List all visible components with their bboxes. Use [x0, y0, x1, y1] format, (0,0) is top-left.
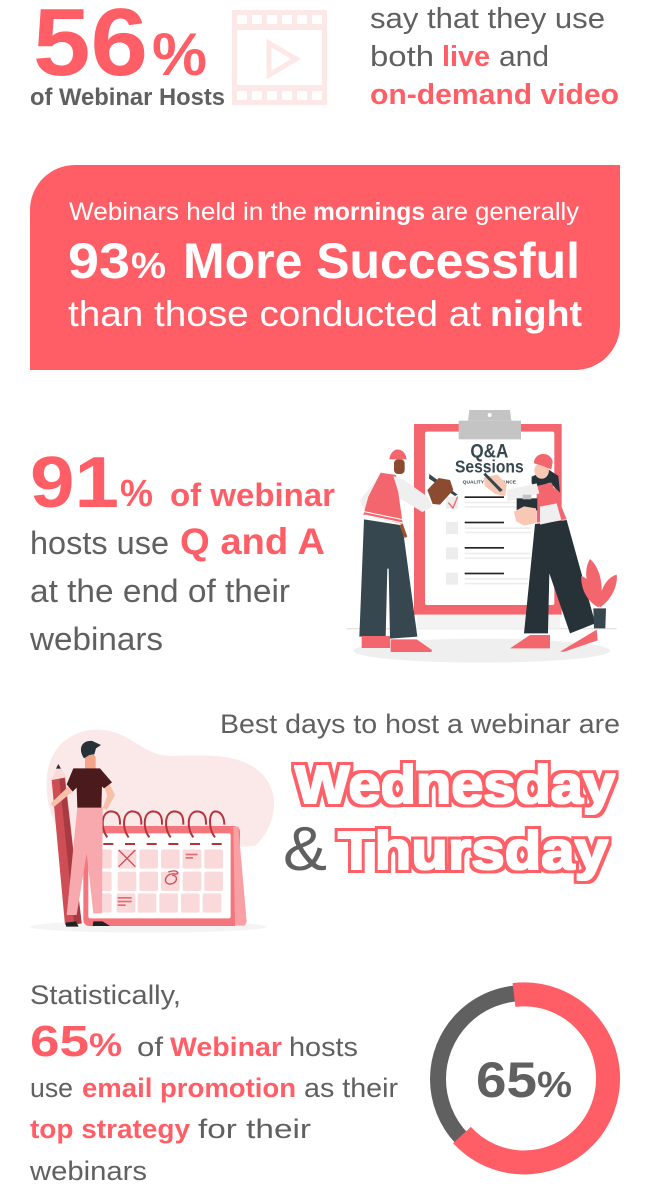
- panel: morning webinars: [30, 165, 620, 370]
- big number 56%: %: [152, 21, 207, 88]
- text: email promotion stat: 65: [30, 1017, 89, 1066]
- section: 56 percent stat: [30, 0, 619, 111]
- text: 91% of webinar hosts: at the end of their: [30, 573, 290, 609]
- text: email promotion stat: as their: [304, 1073, 398, 1103]
- panel headline: 93% More Successful: More Successful: [183, 233, 580, 289]
- chart: 65 percent donut: %: [537, 1064, 572, 1105]
- big number 56%: [33, 0, 207, 96]
- outlined word: Wednesday: Wednesday: [295, 755, 615, 815]
- caption: of Webinar Hosts: of Webinar Hosts: [30, 84, 225, 111]
- text: 91% of webinar hosts: [29, 443, 335, 657]
- section: email promotion: [29, 980, 610, 1186]
- chart: 65 percent donut: 65: [476, 1052, 537, 1108]
- text: 91% of webinar hosts: of webinar: [170, 477, 335, 513]
- text: email promotion stat: use: [30, 1073, 73, 1103]
- text: live and on-demand video: live: [442, 41, 490, 73]
- illustration: Q and A clipboard with two people: QUALITY ASSURANCE: [463, 479, 516, 484]
- text: email promotion stat: of: [137, 1032, 164, 1062]
- text: email promotion stat: %: [89, 1027, 122, 1063]
- text: live and on-demand video: on-demand video: [370, 79, 619, 111]
- chart: 65 percent donut: [438, 993, 610, 1165]
- plant: [581, 559, 617, 628]
- text: email promotion stat: Statistically,: [30, 980, 181, 1010]
- text: live and on-demand video: both: [370, 41, 434, 73]
- panel line 1: mornings: [313, 198, 425, 226]
- text: live and on-demand video: say that they use: [370, 3, 605, 35]
- section: best days: [30, 709, 620, 933]
- text: 91% of webinar hosts: %: [120, 473, 153, 515]
- text: best days to host: Best days to host a webinar are: [220, 709, 620, 739]
- illustration: man with pencil and calendar: [30, 730, 274, 933]
- panel headline: 93% More Successful: %: [131, 245, 166, 286]
- text: email promotion stat: webinars: [29, 1156, 147, 1186]
- ampersand: &: [283, 815, 327, 884]
- panel line 1: are generally: [431, 198, 580, 226]
- panel headline: 93% More Successful: 93: [68, 233, 130, 289]
- person right: [483, 454, 598, 652]
- icon: video film strip: [232, 10, 327, 105]
- illustration: Q and A clipboard with two people: Sessions: [455, 457, 524, 477]
- text: 91% of webinar hosts: Q and A: [180, 521, 325, 562]
- panel line 1: Webinars held in the: [69, 198, 307, 226]
- illustration: Q and A clipboard with two people: Q&A: [470, 441, 508, 462]
- panel line 1: [69, 198, 580, 226]
- text: live and on-demand video: and: [499, 41, 549, 73]
- person left: [359, 449, 458, 652]
- outlined word: Thursday: Thursday: [338, 821, 608, 881]
- text: email promotion stat: hosts: [289, 1032, 358, 1062]
- panel line 3: than those conducted at: [68, 293, 481, 334]
- illustration: Q and A clipboard with two people: [347, 410, 617, 663]
- text: email promotion stat: top strategy: [30, 1114, 190, 1144]
- text: email promotion stat: Webinar: [170, 1032, 283, 1062]
- text: 91% of webinar hosts: 91: [30, 443, 119, 523]
- text: live and on-demand video: [370, 3, 619, 111]
- text: email promotion stat: email promotion: [82, 1073, 296, 1103]
- panel background: [30, 165, 620, 370]
- text: 91% of webinar hosts: webinars: [29, 621, 163, 657]
- text: 91% of webinar hosts: hosts use: [30, 525, 169, 561]
- section: Q and A stat: [29, 410, 617, 663]
- text: email promotion stat: for their: [198, 1114, 311, 1144]
- text: email promotion stat: [29, 980, 398, 1186]
- panel line 3: night: [490, 293, 582, 334]
